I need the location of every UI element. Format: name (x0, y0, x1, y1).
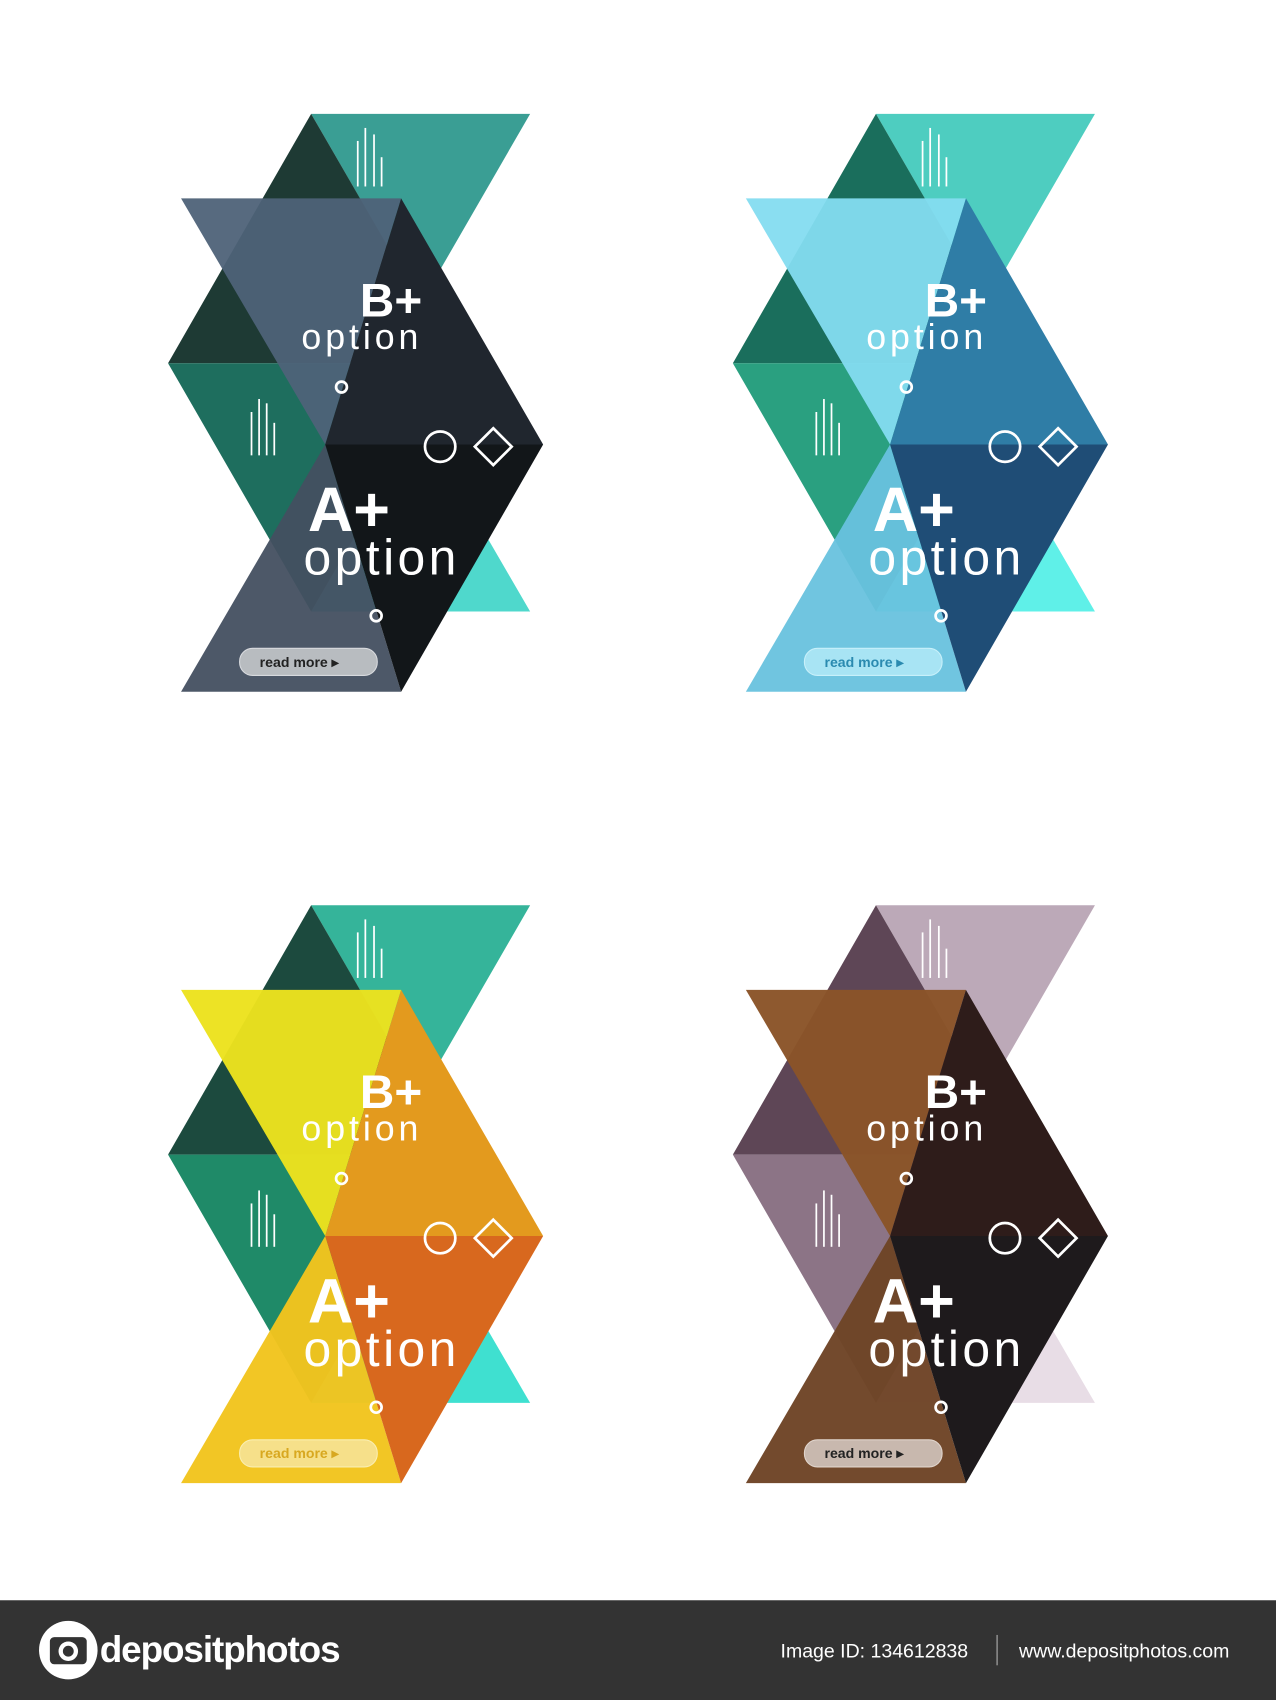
text: B+ option: B+ (360, 1066, 422, 1119)
text: A+ option: option (304, 530, 456, 586)
text: A+ option: A+ (873, 1267, 955, 1337)
button: read more (804, 1440, 942, 1467)
text: A+ option: A+ (308, 475, 390, 545)
text: A+ option: A+ (873, 475, 955, 545)
icon: bars top (358, 128, 382, 186)
button: read more: read more ▸ (260, 654, 340, 670)
icon: camera logo (39, 1621, 98, 1679)
text: B+ option (301, 275, 422, 357)
text: A+ option (304, 1267, 456, 1377)
panel: module brown purple (733, 905, 1108, 1483)
icon: bars top (923, 919, 946, 978)
button: read more: read more ▸ (260, 1445, 340, 1461)
text: A+ option (304, 475, 456, 586)
text: B+ option: option (301, 317, 418, 357)
text: logo: depositphotos (100, 1629, 340, 1670)
icon: bars bottom (816, 399, 839, 455)
icons: circles and diamond (336, 1173, 512, 1413)
footer bar (0, 1600, 1276, 1700)
panel: module dark teal (168, 114, 543, 692)
icon: bars bottom (252, 1190, 274, 1247)
button: read more: read more ▸ (825, 1445, 904, 1461)
text: B+ option (866, 275, 987, 357)
icon: bars bottom (252, 399, 274, 455)
text: B+ option (866, 1066, 987, 1149)
text: B+ option: option (866, 1109, 983, 1149)
text: A+ option: option (868, 1321, 1021, 1377)
panel: module blue (733, 114, 1108, 692)
icon: bars top (358, 919, 382, 978)
text: B+ option (301, 1066, 422, 1149)
text: B+ option: option (866, 317, 983, 357)
text: A+ option (868, 475, 1021, 586)
button: read more (240, 648, 377, 675)
icons: circles and diamond (336, 382, 512, 621)
text: B+ option: B+ (925, 1066, 987, 1119)
button: read more (240, 1440, 377, 1467)
panel: module yellow orange (168, 905, 543, 1483)
text: A+ option (868, 1267, 1021, 1377)
text: A+ option: A+ (308, 1267, 390, 1337)
text: website: www.depositphotos.com (1018, 1641, 1229, 1663)
text: B+ option: option (301, 1109, 418, 1149)
text: B+ option: B+ (925, 275, 987, 328)
text: A+ option: option (868, 530, 1021, 586)
icon: bars top (923, 128, 946, 186)
text: A+ option: option (304, 1321, 456, 1377)
icons: circles and diamond (901, 1173, 1077, 1413)
text: image id: Image ID: 134612838 (781, 1641, 968, 1663)
button: read more (804, 648, 942, 675)
icons: circles and diamond (901, 382, 1077, 621)
button: read more: read more ▸ (825, 654, 904, 670)
icon: bars bottom (816, 1190, 839, 1247)
text: B+ option: B+ (360, 275, 422, 328)
